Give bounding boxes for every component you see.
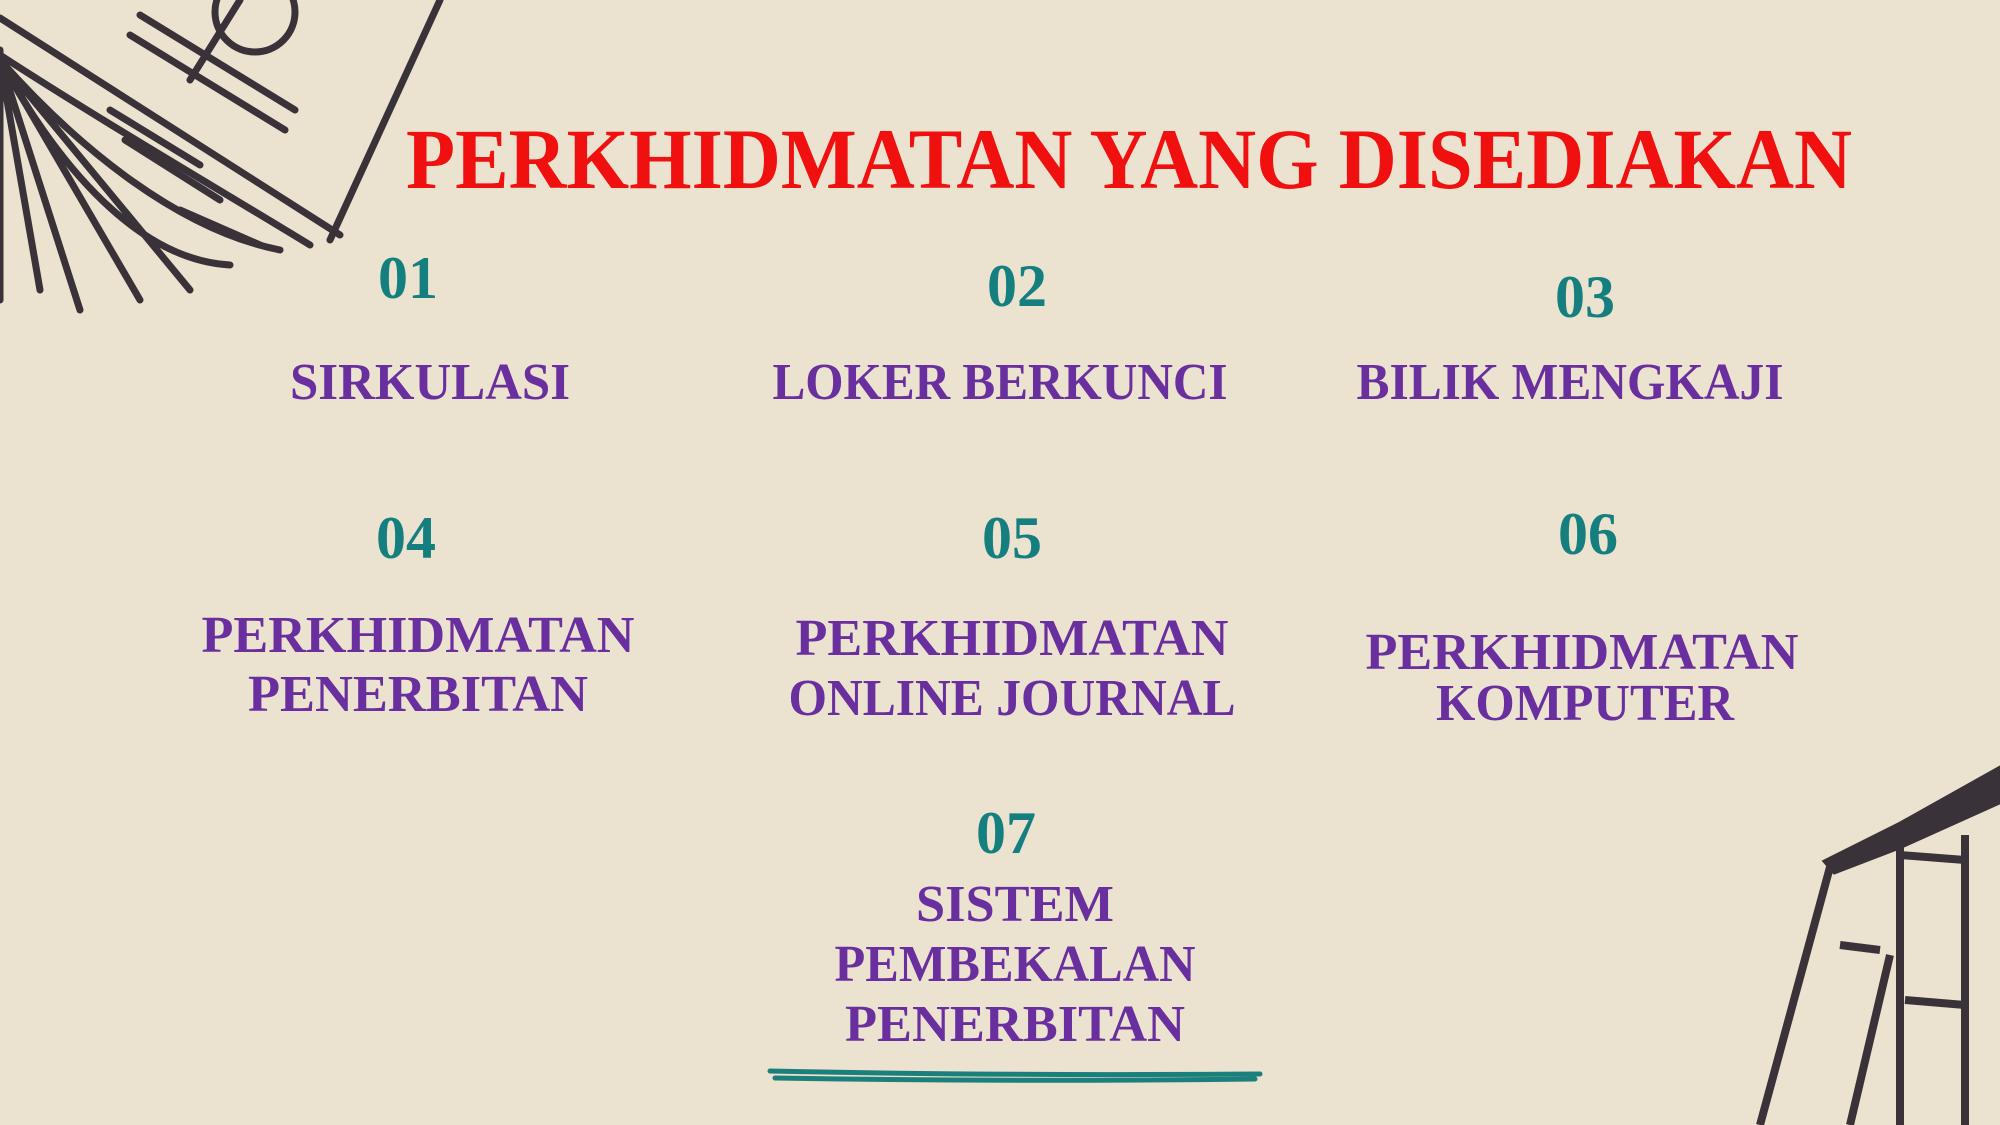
item 01: 01 <box>378 245 438 311</box>
item 05: 05 <box>982 505 1042 571</box>
item 07: PEMBEKALAN <box>834 936 1196 993</box>
item 06: 06 <box>1558 501 1618 567</box>
item 05: ONLINE JOURNAL <box>788 670 1236 727</box>
item 07: PENERBITAN <box>845 996 1185 1053</box>
item 07: SISTEM <box>916 876 1114 933</box>
item 06: PERKHIDMATAN <box>1366 624 1798 681</box>
item 05 <box>788 505 1236 727</box>
illustration: open book top-left <box>0 0 440 310</box>
item 04: 04 <box>376 505 436 571</box>
item 06: KOMPUTER <box>1436 675 1735 732</box>
item 01: SIRKULASI <box>290 354 570 411</box>
item 02 <box>772 253 1228 411</box>
item 02: 02 <box>987 253 1047 319</box>
item 03 <box>1356 264 1784 411</box>
item 07 <box>834 800 1196 1053</box>
title: PERKHIDMATAN YANG DISEDIAKAN <box>406 111 1852 207</box>
item 02: LOKER BERKUNCI <box>772 354 1228 411</box>
item 01 <box>290 245 570 411</box>
item 04 <box>202 505 634 723</box>
item 04: PERKHIDMATAN <box>202 607 634 664</box>
item 05: PERKHIDMATAN <box>796 610 1228 667</box>
item 03: 03 <box>1555 264 1615 330</box>
item 07: 07 <box>976 800 1036 866</box>
illustration: books bottom-right <box>1760 770 2000 1125</box>
underline stroke <box>770 1071 1260 1080</box>
item 03: BILIK MENGKAJI <box>1356 354 1784 411</box>
item 04: PENERBITAN <box>248 666 588 723</box>
item 06 <box>1366 501 1798 732</box>
